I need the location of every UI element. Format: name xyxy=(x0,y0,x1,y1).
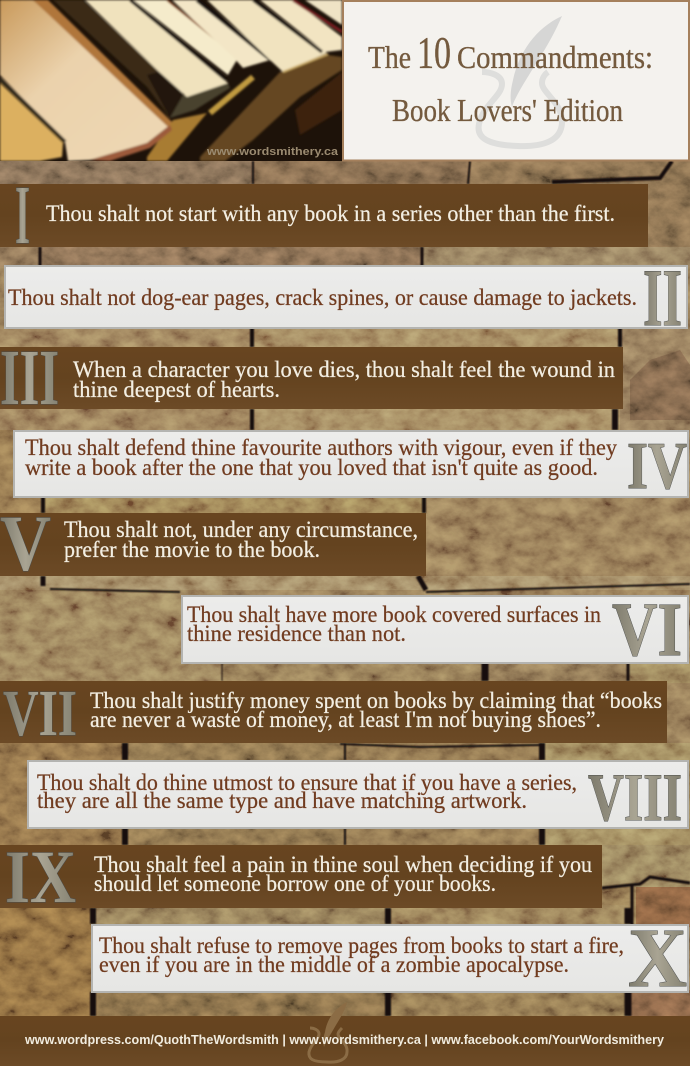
footer quill logo xyxy=(309,1002,347,1062)
commandment X: even if you are in the middle of a zombie apocalypse. xyxy=(99,952,569,977)
commandment IV xyxy=(14,429,688,503)
title text line 1: The xyxy=(368,39,411,75)
commandment X xyxy=(92,912,688,1005)
commandment VII xyxy=(0,677,667,750)
title panel xyxy=(343,1,689,160)
title text line 1: Commandments: xyxy=(457,39,653,75)
commandment VII: Thou shalt justify money spent on books by claiming that “books xyxy=(90,688,662,713)
footer links: www.wordpress.com/QuothTheWordsmith | www.wordsmithery.ca | www.facebook.com/YourWordsmithery xyxy=(24,1032,665,1047)
commandment VIII: they are all the same type and have matching artwork. xyxy=(37,788,527,813)
title text line 1: 10 xyxy=(417,27,451,78)
commandment VI: Thou shalt have more book covered surfaces in xyxy=(187,602,601,627)
commandment I: Thou shalt not start with any book in a series other than the first. xyxy=(46,201,615,226)
commandment VIII: Thou shalt do thine utmost to ensure that if you have a series, xyxy=(37,770,577,795)
photo watermark url: www.wordsmithery.ca xyxy=(206,146,339,158)
commandment V: prefer the movie to the book. xyxy=(64,537,320,562)
commandment V: Thou shalt not, under any circumstance, xyxy=(64,517,418,542)
commandment VI xyxy=(182,588,688,672)
commandment III: thine deepest of hearts. xyxy=(73,377,280,402)
quill logo watermark xyxy=(479,16,562,146)
commandment I xyxy=(0,169,648,262)
commandment VII: are never a waste of money, at least I'm not buying shoes”. xyxy=(90,707,601,732)
title text line 2: Book Lovers' Edition xyxy=(392,92,623,128)
commandment I: I xyxy=(15,169,30,262)
commandment III: III xyxy=(0,335,59,422)
commandment III xyxy=(0,335,623,422)
commandment VIII xyxy=(28,759,688,835)
commandment II: Thou shalt not dog-ear pages, crack spines, or cause damage to jackets. xyxy=(8,285,637,310)
commandment VII: VII xyxy=(3,677,77,750)
commandment V: V xyxy=(0,501,51,588)
commandment IV: Thou shalt defend thine favourite authors with vigour, even if they xyxy=(25,435,617,460)
title text line 1 xyxy=(368,27,653,78)
commandment IX xyxy=(0,836,602,919)
footer bar xyxy=(0,1002,690,1066)
commandment V xyxy=(0,501,426,588)
commandment VI: thine residence than not. xyxy=(187,621,406,646)
commandment IX: Thou shalt feel a pain in thine soul when deciding if you xyxy=(94,852,592,877)
commandment IX: IX xyxy=(5,836,76,919)
commandment II xyxy=(5,252,687,343)
photo of old books xyxy=(0,0,342,161)
commandment III: When a character you love dies, thou shalt feel the wound in xyxy=(73,357,615,382)
commandment IV: write a book after the one that you loved that isn't quite as good. xyxy=(25,455,598,480)
commandment X: Thou shalt refuse to remove pages from books to start a fire, xyxy=(99,933,624,958)
commandment X: X xyxy=(628,912,687,1005)
commandment IX: should let someone borrow one of your books. xyxy=(94,871,496,896)
